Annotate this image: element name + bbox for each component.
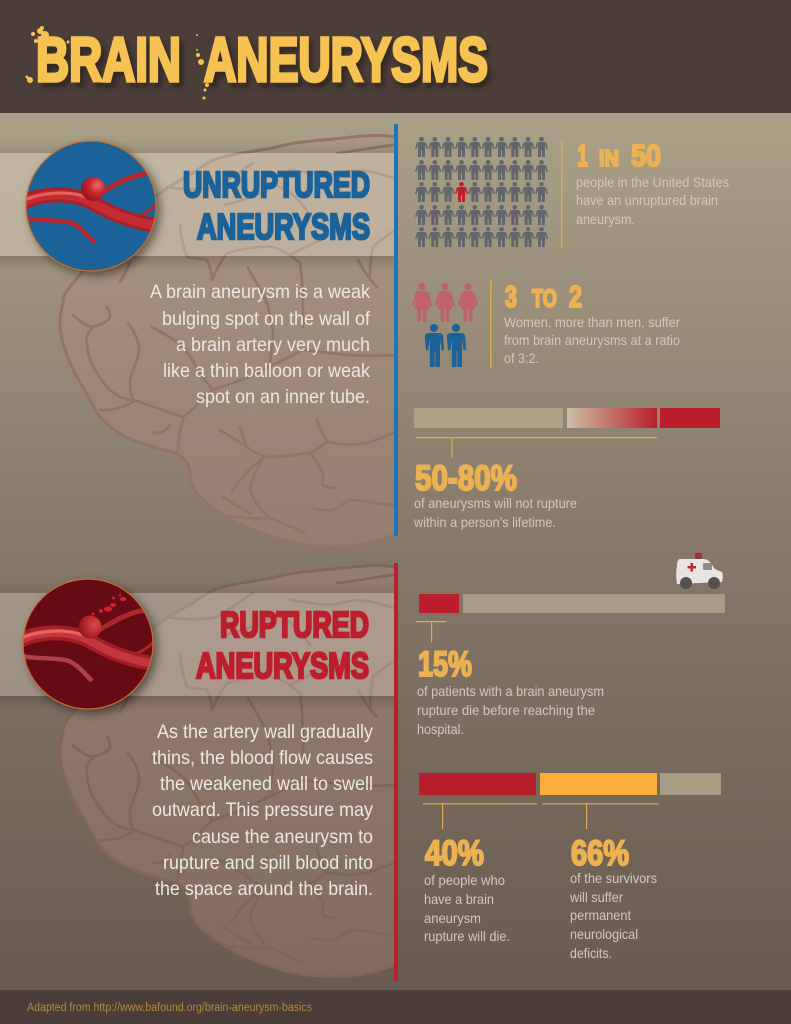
text: ruptured description	[152, 721, 373, 900]
heading: unruptured aneurysms: ANEURYSMS	[197, 206, 370, 247]
stat: 66%: permanent	[570, 907, 631, 923]
stat: 15%: 15%	[418, 645, 472, 684]
stat: 15%: of patients with a brain aneurysm	[417, 683, 604, 699]
brain outline: upper	[60, 135, 400, 546]
title: BRAIN	[40, 31, 185, 100]
stat: 50-80%: within a person’s lifetime.	[413, 514, 556, 530]
stat: 66%: neurological	[570, 926, 638, 942]
panel: unruptured banner	[0, 141, 394, 270]
text: ruptured description: thins, the blood flow causes	[152, 747, 373, 769]
stat: 15%	[417, 645, 604, 737]
stat: 40%	[424, 834, 510, 944]
stat: 50-80%: of aneurysms will not rupture	[414, 495, 577, 511]
icon: women and men ratio	[412, 283, 478, 367]
chart: 15% bar	[416, 594, 725, 642]
stat: 1 in 50: people in the United States	[576, 174, 729, 190]
stat: 40%: of people who	[424, 872, 505, 888]
text: ruptured description: As the artery wall gradually	[157, 721, 373, 743]
text: ruptured description: outward. This pressure may	[152, 799, 373, 821]
stat: 3 to 2: from brain aneurysms at a ratio	[504, 332, 680, 348]
stat: 1 in 50: have an unruptured brain	[576, 192, 718, 208]
chart: 1 in 50 people grid	[415, 137, 548, 247]
text: unruptured description: like a thin balloon or weak	[163, 360, 370, 382]
stat: 50-80%	[413, 459, 577, 530]
heading: ruptured aneurysms	[196, 604, 369, 686]
heading: ruptured aneurysms: RUPTURED	[220, 604, 369, 645]
stat: 66%: of the survivors	[570, 870, 657, 886]
heading: unruptured aneurysms: UNRUPTURED	[183, 164, 370, 205]
stat: 3 to 2: 2	[569, 279, 582, 314]
title: ANEURYSMS	[208, 31, 491, 100]
panel: ruptured banner	[0, 581, 394, 710]
stat: 15%: rupture die before reaching the	[417, 702, 595, 718]
text: unruptured description: a brain artery very much	[176, 334, 370, 356]
text: unruptured description: spot on an inner tube.	[196, 386, 370, 408]
stat: 66%: 66%	[571, 834, 629, 873]
icon: ambulance	[676, 553, 723, 589]
icon: unruptured artery circle	[20, 141, 160, 275]
stat: 15%: hospital.	[417, 721, 464, 737]
footer band	[0, 990, 791, 1024]
stat: 1 in 50: 1	[577, 138, 588, 173]
stat: 1 in 50: aneurysm.	[576, 211, 635, 227]
stat: 1 in 50	[561, 138, 729, 248]
stat: 3 to 2	[490, 279, 680, 368]
stat: 40%: 40%	[425, 834, 484, 873]
text: ruptured description: the space around the brain.	[155, 878, 373, 900]
stat: 66%	[569, 834, 657, 961]
text: ruptured description: rupture and spill blood into	[163, 852, 373, 874]
heading: ruptured aneurysms: ANEURYSMS	[196, 645, 369, 686]
stat: 3 to 2: of 3:2.	[504, 350, 539, 366]
stat: 1 in 50: 50	[631, 138, 661, 173]
text: unruptured description: bulging spot on the wall of	[162, 308, 371, 330]
footer source: Adapted from http://www.bafound.org/brain-aneurysm-basics	[27, 1002, 312, 1014]
icon: ruptured artery circle	[17, 579, 157, 713]
stat: 3 to 2: TO	[532, 285, 557, 313]
red divider	[394, 563, 398, 981]
header band	[0, 0, 791, 113]
stat: 40%: have a brain	[424, 891, 494, 907]
text: ruptured description: the weakened wall to swell	[160, 773, 373, 795]
stat: 50-80%: 50-80%	[415, 459, 517, 498]
stat: 3 to 2: 3	[505, 279, 517, 314]
blue divider	[394, 124, 398, 536]
brain outline: lower	[60, 565, 400, 976]
stat: 3 to 2: Women, more than men, suffer	[504, 314, 680, 330]
stat: 40%: aneurysm	[424, 910, 481, 926]
title: ANEURYSMS	[204, 26, 488, 95]
stat: 1 in 50: IN	[599, 145, 619, 171]
text: ruptured description: cause the aneurysm to	[192, 826, 373, 848]
title	[26, 26, 491, 100]
text: unruptured description: A brain aneurysm is a weak	[150, 281, 370, 303]
stat: 66%: deficits.	[570, 945, 612, 961]
stat: 66%: will suffer	[569, 889, 623, 905]
chart: 50-80% bar	[414, 408, 720, 458]
title: BRAIN	[36, 26, 181, 95]
stat: 40%: rupture will die.	[424, 928, 510, 944]
text: unruptured description	[150, 281, 371, 408]
heading: unruptured aneurysms	[183, 164, 370, 247]
chart: 40% and 66% bar	[419, 773, 721, 829]
